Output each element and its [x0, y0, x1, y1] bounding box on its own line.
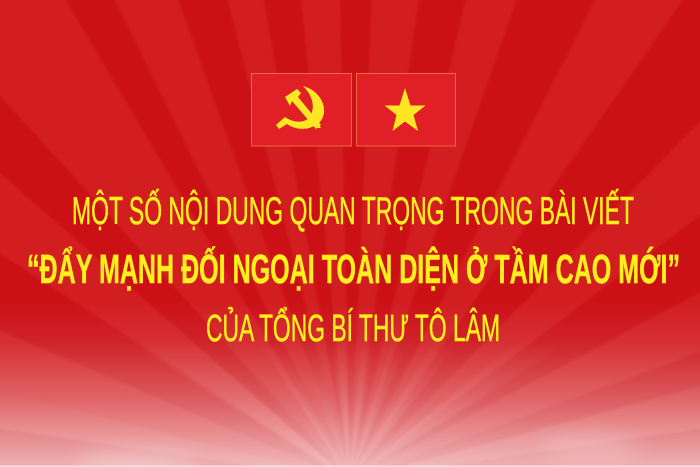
icon: gold star flag: [356, 74, 456, 146]
icon: hammer and sickle flag: [252, 74, 352, 146]
title line 3: CỦA TỔNG BÍ THƯ TÔ LÂM: [206, 305, 500, 350]
title block: [27, 188, 680, 350]
